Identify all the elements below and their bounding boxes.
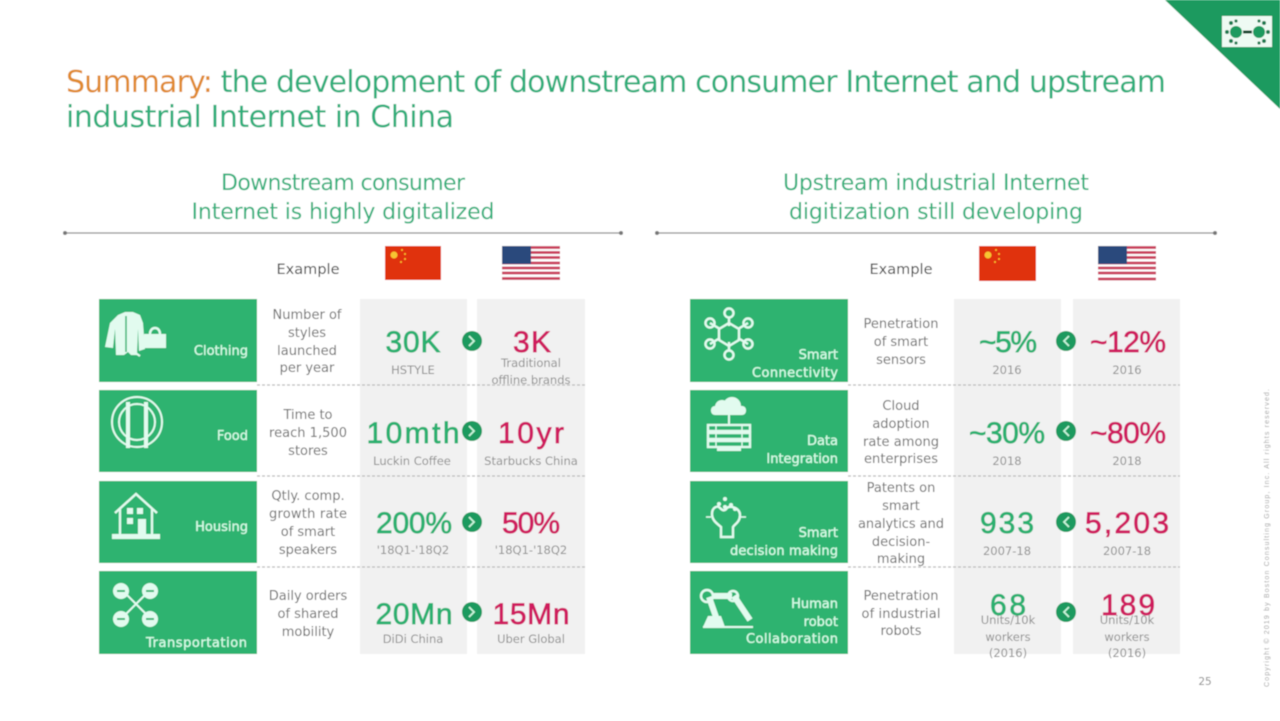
panel: upstream industrial Internet <box>655 171 1217 660</box>
row: data integration: 2018 <box>1112 454 1142 468</box>
row: data integration: 2018 <box>992 454 1022 468</box>
row: human robot collaboration: Units/10k <box>1100 613 1155 627</box>
row: data integration: adoption <box>872 417 930 432</box>
title: industrial Internet in China <box>66 100 454 135</box>
heading: downstream <box>192 171 494 225</box>
row: housing: 50% <box>502 507 560 540</box>
row: human robot collaboration: Units/10k <box>981 613 1036 627</box>
row: food: reach 1,500 <box>269 426 347 441</box>
row: housing: '18Q1-'18Q2 <box>495 543 567 557</box>
row: clothing: styles <box>288 326 326 341</box>
row: smart decision making: Smart <box>799 526 838 541</box>
row: clothing: 3K <box>513 326 551 359</box>
column label: example: Example <box>870 262 933 278</box>
comparison marker <box>462 331 482 351</box>
row: human robot collaboration: workers <box>985 630 1031 644</box>
row: data integration <box>690 390 1166 472</box>
row: human robot collaboration: robots <box>880 624 922 639</box>
row: human robot collaboration: Penetration <box>864 589 938 604</box>
row: housing: Qtly. comp. <box>271 489 345 504</box>
icon: clothing <box>105 312 166 356</box>
row: data integration: ~80% <box>1090 417 1166 450</box>
icon: house <box>112 494 160 539</box>
row: smart decision making <box>690 481 1169 567</box>
comparison marker <box>462 512 482 532</box>
row: food: Luckin Coffee <box>373 454 451 468</box>
copyright note: Copyright © 2019 by Boston Consulting Group, Inc. All rights reserved. <box>1263 389 1271 687</box>
row: data integration: Integration <box>766 452 838 467</box>
row: smart decision making: decision- <box>872 535 930 550</box>
row: smart connectivity: Penetration <box>864 317 938 332</box>
icon: cloud and server <box>708 397 750 451</box>
row: smart connectivity: 2016 <box>1112 363 1142 377</box>
icon: China flag <box>979 246 1036 281</box>
row: human robot collaboration: robot <box>804 615 838 630</box>
row: clothing: Traditional <box>500 356 561 370</box>
row: smart decision making: 5,203 <box>1085 507 1169 540</box>
comparison marker <box>462 602 482 622</box>
row: transportation: DiDi China <box>383 632 443 646</box>
row: food <box>99 390 578 472</box>
row: smart decision making: 2007-18 <box>983 544 1031 558</box>
row: transportation: 20Mn <box>376 598 452 631</box>
heading: upstream: digitization still developing <box>789 200 1083 225</box>
row: human robot collaboration: Collaboration <box>746 632 838 647</box>
divider line: upstream <box>655 231 1217 235</box>
row: transportation: Daily orders <box>269 589 347 604</box>
row: food: 10mth <box>366 417 460 450</box>
row: food: Starbucks China <box>484 454 578 468</box>
row: clothing <box>99 299 571 387</box>
comparison marker <box>1056 602 1076 622</box>
row: smart connectivity: Connectivity <box>752 366 838 381</box>
heading: upstream <box>783 171 1089 225</box>
title <box>66 65 1166 135</box>
icon: transportation network <box>113 583 158 627</box>
row: human robot collaboration <box>690 571 1155 660</box>
divider line: downstream <box>63 231 623 235</box>
row: human robot collaboration: workers <box>1104 630 1150 644</box>
comparison background columns <box>360 299 585 654</box>
row: housing: speakers <box>279 543 337 558</box>
row: food: 10yr <box>498 417 564 450</box>
row: transportation: Transportation <box>145 636 247 651</box>
row: smart decision making: 2007-18 <box>1103 544 1151 558</box>
row: housing: '18Q1-'18Q2 <box>377 543 449 557</box>
row: smart decision making: 933 <box>980 507 1034 540</box>
row: clothing: offline brands <box>491 373 571 387</box>
row: smart connectivity: Smart <box>799 348 838 363</box>
row: clothing: HSTYLE <box>391 363 435 377</box>
row: data integration: Cloud <box>882 399 920 414</box>
row: data integration: ~30% <box>969 417 1045 450</box>
row: transportation: Uber Global <box>497 632 565 646</box>
row: clothing: Number of <box>272 308 342 323</box>
row: smart decision making: analytics and <box>858 517 944 532</box>
row: data integration: Data <box>807 434 838 449</box>
row: human robot collaboration: (2016) <box>989 646 1027 660</box>
row: smart decision making: smart <box>882 499 920 514</box>
row: housing: growth rate <box>269 507 347 522</box>
comparison marker <box>1056 331 1076 351</box>
row: housing: of smart <box>281 525 335 540</box>
row: smart decision making: decision making <box>730 544 838 559</box>
row: smart connectivity: ~12% <box>1090 326 1166 359</box>
row separators <box>257 385 585 567</box>
row: human robot collaboration: 68 <box>990 589 1026 622</box>
icon: robot arm <box>701 590 753 628</box>
comparison background columns <box>954 299 1180 654</box>
row: smart connectivity: sensors <box>876 353 926 368</box>
row: clothing: 30K <box>386 326 440 359</box>
comparison marker <box>1056 512 1076 532</box>
icon: US flag <box>502 246 560 280</box>
row: human robot collaboration: of industrial <box>862 607 940 622</box>
row: smart decision making: Patents on <box>867 481 935 496</box>
heading: upstream: Upstream industrial Internet <box>783 171 1089 196</box>
corner logo badge <box>1165 0 1280 109</box>
row: smart connectivity: 2016 <box>992 363 1022 377</box>
row: food: Food <box>217 429 248 444</box>
row: clothing: launched <box>277 344 337 359</box>
panel: downstream consumer Internet <box>63 171 623 654</box>
column label: example: Example <box>276 262 340 278</box>
row: transportation <box>99 571 570 654</box>
icon: head with ideas <box>706 497 746 537</box>
row: smart connectivity: of smart <box>874 335 928 350</box>
row: data integration: enterprises <box>864 452 938 467</box>
row: data integration: rate among <box>863 435 939 450</box>
row: clothing: per year <box>280 361 335 376</box>
row: human robot collaboration: 189 <box>1101 589 1155 622</box>
row: food: stores <box>288 444 328 459</box>
row: smart decision making: making <box>877 552 925 567</box>
comparison marker <box>1056 421 1076 441</box>
row: human robot collaboration: (2016) <box>1108 646 1146 660</box>
row: transportation: of shared <box>278 607 338 622</box>
row: transportation: 15Mn <box>492 598 570 631</box>
heading: downstream: Internet is highly digitalized <box>192 200 494 225</box>
title: Summary: the development of downstream consumer Internet and upstream <box>66 65 1166 100</box>
row: clothing: Clothing <box>194 344 248 359</box>
icon: connectivity hub <box>706 308 752 360</box>
row: housing: 200% <box>376 507 452 540</box>
row: housing <box>99 481 567 563</box>
row: human robot collaboration: Human <box>791 597 838 612</box>
icon: China flag <box>385 246 441 280</box>
page number: 25 <box>1198 676 1212 688</box>
comparison marker <box>462 421 482 441</box>
icon: food <box>112 397 162 448</box>
row: housing: Housing <box>195 520 248 535</box>
row: transportation: mobility <box>282 625 335 640</box>
row: smart connectivity: ~5% <box>979 326 1037 359</box>
icon: US flag <box>1098 246 1156 281</box>
row separators <box>848 385 1180 567</box>
row: food: Time to <box>282 408 333 423</box>
heading: downstream: Downstream consumer <box>221 171 466 196</box>
row: smart connectivity <box>690 299 1166 382</box>
